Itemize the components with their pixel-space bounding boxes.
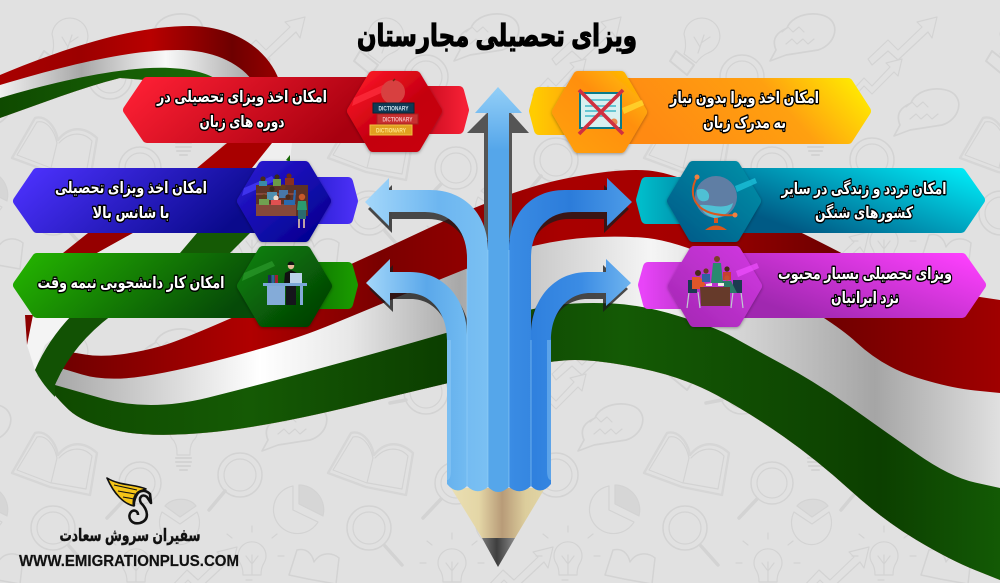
icon: dictionaries and apple: DICTIONARY — [378, 106, 408, 112]
website: WWW.EMIGRATIONPLUS.COM — [19, 553, 239, 570]
flag ribbon: main wave — [0, 150, 1000, 583]
panel text: به مدرک زبان — [703, 115, 786, 132]
panel: student part-time work (green) — [18, 251, 353, 322]
panel: popular among Iranians (magenta) — [643, 251, 981, 322]
arrow: upper right — [509, 178, 632, 491]
pencil wood — [451, 488, 545, 538]
panel text: امکان کار دانشجویی نیمه وقت — [38, 275, 224, 292]
pencil lead — [482, 538, 515, 567]
panel text — [669, 90, 819, 132]
icon: crossed out certificate — [579, 90, 623, 134]
panel: visa without language certificate (orange) — [534, 76, 866, 148]
pencil with five arrows — [365, 87, 632, 567]
icon: dictionaries and apple: DICTIONARY — [376, 128, 406, 134]
title: ویزای تحصیلی مجارستان — [357, 20, 637, 54]
flag ribbon: upper left strand — [0, 26, 292, 370]
icon: globe — [693, 174, 738, 230]
panel text: با شانس بالا — [92, 205, 170, 222]
panel text: نزد ایرانیان — [831, 290, 899, 307]
icon: dictionaries and apple — [370, 79, 418, 135]
panel text — [55, 180, 207, 222]
panel text: کشورهای شنگن — [815, 203, 914, 222]
panel text — [156, 89, 327, 131]
arrow: upper left — [365, 178, 488, 491]
arrow shadows — [368, 185, 629, 477]
panel text: دوره های زبان — [200, 114, 284, 131]
panel text — [781, 179, 946, 222]
panel text: امکان اخذ ویزا بدون نیاز — [669, 90, 819, 107]
company name: سفیران سروش سعادت — [60, 526, 200, 546]
panel: language course visa (red) — [128, 76, 464, 147]
panel: Schengen travel (teal) — [641, 166, 980, 237]
logo — [19, 478, 239, 570]
arrow: centre up — [475, 87, 522, 492]
icon: office desk — [263, 262, 307, 305]
centre arrow shadow — [467, 113, 529, 240]
arrow: lower right — [531, 259, 631, 491]
arrow: lower left — [366, 259, 467, 491]
panel text: امکان اخذ ویزای تحصیلی در — [156, 89, 327, 106]
icon: classroom — [256, 173, 308, 228]
panel text: ویزای تحصیلی بسیار محبوب — [778, 266, 952, 283]
icon: meeting around a table — [687, 256, 743, 308]
panel text: امکان تردد و زندگی در سایر — [781, 179, 946, 198]
panel: high chance visa (blue) — [18, 166, 353, 237]
icon: dictionaries and apple: DICTIONARY — [382, 118, 412, 124]
panel text — [778, 266, 952, 307]
panel text: امکان اخذ ویزای تحصیلی — [55, 180, 207, 197]
icon: winged bird — [107, 478, 151, 523]
